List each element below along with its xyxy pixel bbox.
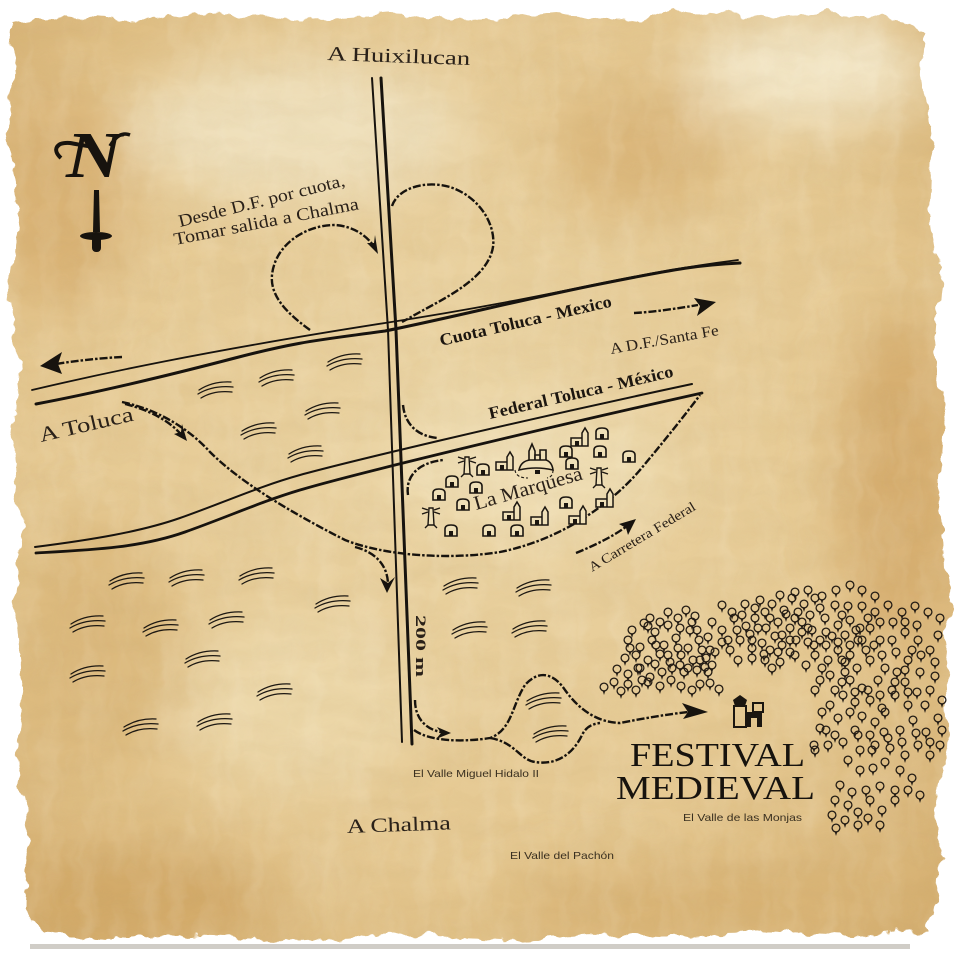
- route: east arrow: [634, 305, 698, 313]
- road: Federal Toluca - Mexico: [35, 384, 702, 553]
- road: Cuota Toluca - Mexico: [32, 260, 740, 404]
- icon: La Marquesa castle: [515, 444, 553, 478]
- icon: north compass N with sword: [56, 119, 130, 252]
- title: Festival Medieval: FESTIVAL: [630, 737, 805, 774]
- label: El Valle Miguel Hidalo II: El Valle Miguel Hidalo II: [413, 768, 539, 780]
- route: branch arrow down to road: [355, 547, 388, 585]
- icon: north compass N with sword: N: [65, 119, 125, 192]
- label: El Valle del Pachon: El Valle del Pachón: [510, 850, 614, 862]
- title: Festival Medieval: [616, 737, 815, 807]
- arrowheads: [40, 235, 716, 739]
- title: Festival Medieval: MEDIEVAL: [616, 770, 815, 807]
- route: A Toluca branch: [125, 404, 184, 438]
- route: A Carretera Federal: [576, 522, 632, 553]
- hills: terrain marks: [70, 354, 568, 742]
- route: to festival: [414, 675, 688, 740]
- label: La Marquesa: La Marquesa: [471, 463, 585, 515]
- label: Cuota Toluca - Mexico: Cuota Toluca - Mexico: [438, 292, 613, 350]
- icon: Festival castle: [733, 695, 763, 727]
- route: lower loop: [490, 723, 600, 763]
- label: A Chalma: A Chalma: [346, 812, 451, 838]
- route: right loop: [392, 184, 493, 322]
- label: Tomar salida a Chalma: Tomar salida a Chalma: [172, 193, 361, 249]
- route: salida a Chalma left loop: [272, 225, 376, 330]
- road: vertical Huixilucan to Chalma: [372, 78, 412, 744]
- label: Desde D.F. por cuota: Desde D.F. por cuota,: [176, 170, 347, 231]
- label: A D.F./Santa Fe: A D.F./Santa Fe: [609, 322, 720, 358]
- label: Federal Toluca - Mexico: Federal Toluca - México: [487, 362, 675, 423]
- label: A Huixilucan: A Huixilucan: [327, 43, 471, 70]
- forest: [604, 585, 942, 828]
- label: A Toluca: A Toluca: [37, 402, 136, 447]
- route: bottom first branch: [415, 700, 448, 733]
- route: federal access top: [403, 405, 437, 438]
- route: west arrow: [56, 357, 122, 364]
- label: 200 m: 200 m: [412, 615, 428, 678]
- route: main federal curve: [122, 395, 700, 556]
- bottom grey shadow strip: [30, 944, 910, 949]
- village: La Marquesa buildings: [422, 428, 635, 536]
- label: El Valle de las Monjas: El Valle de las Monjas: [683, 812, 802, 824]
- label: A Carretera Federal: A Carretera Federal: [586, 499, 698, 575]
- route: federal access lower: [408, 460, 444, 495]
